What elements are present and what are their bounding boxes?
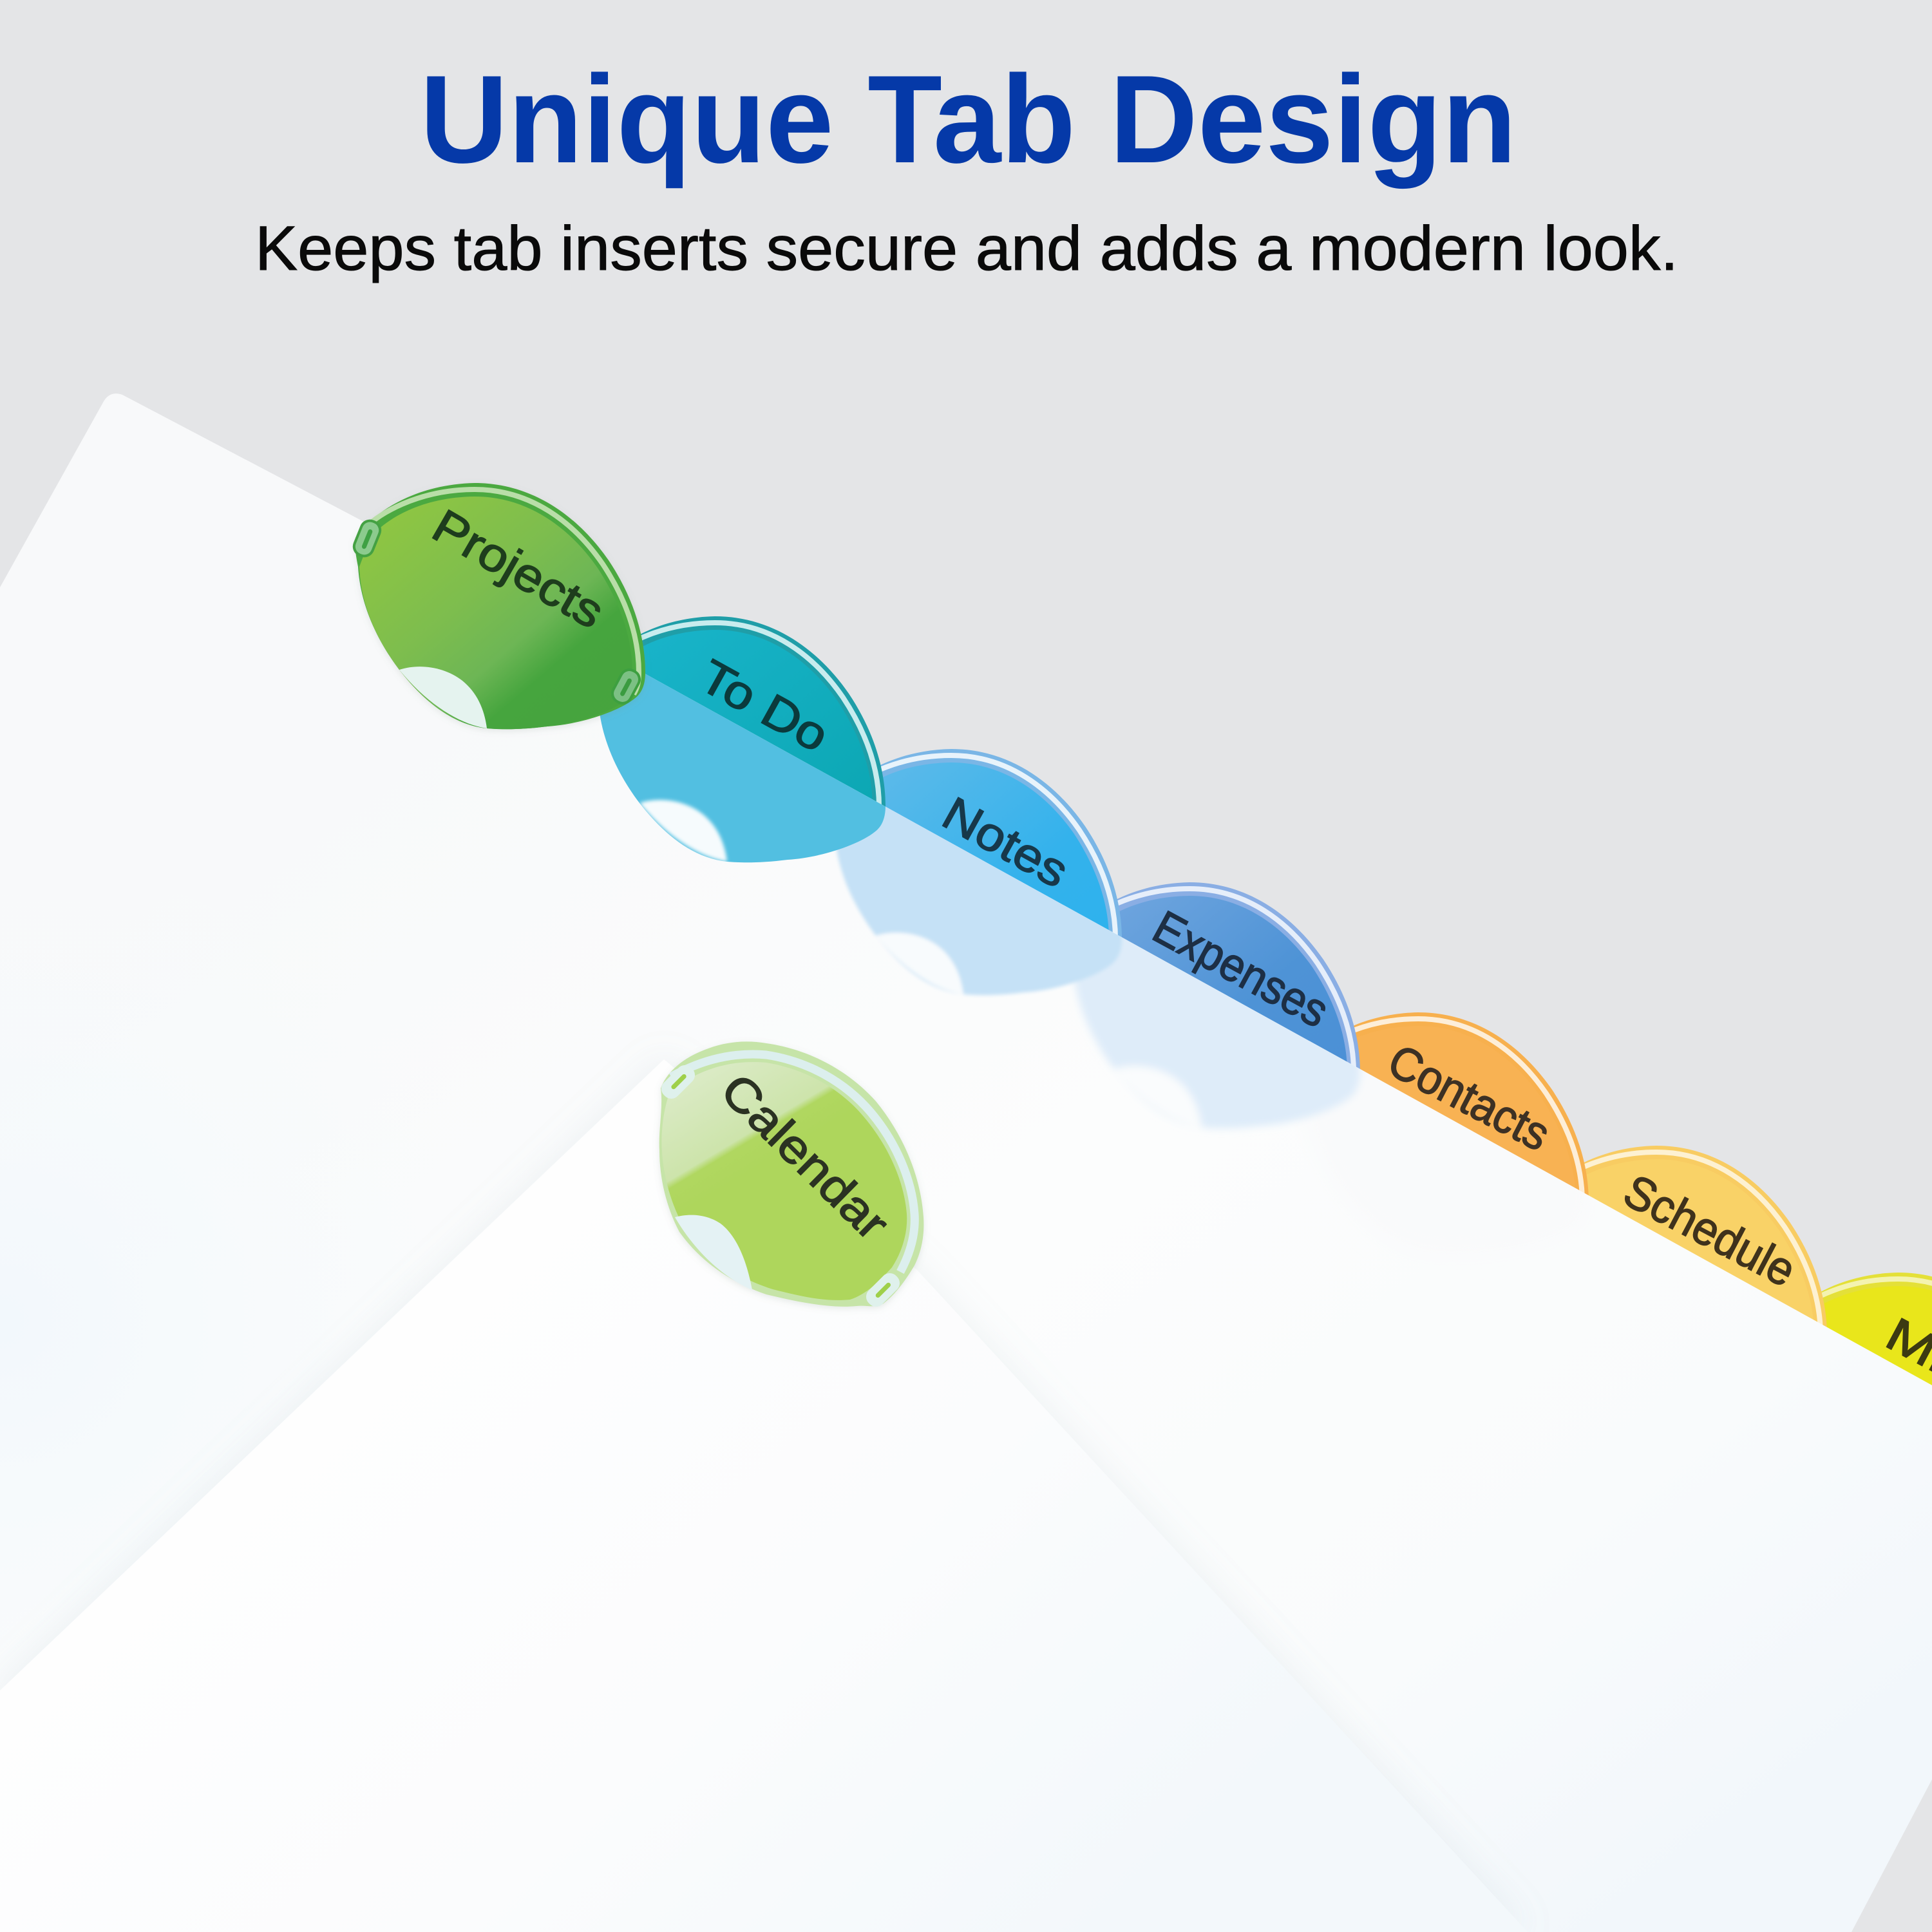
tab: Contacts: Contacts	[1380, 1034, 1558, 1161]
tab: Projects	[352, 483, 645, 729]
notch: white thumb cut-out	[399, 667, 487, 728]
title: Unique Tab Design	[420, 50, 1517, 189]
face: green tab insert	[662, 1062, 907, 1300]
nub: lower right capsule	[609, 667, 643, 706]
tab: To Do	[595, 616, 886, 862]
rim: pale stripe	[671, 1054, 914, 1272]
nub: lower right capsule	[862, 1269, 904, 1311]
tab: Notes: Notes	[934, 787, 1077, 898]
notch: white thumb cut-out	[675, 1215, 752, 1290]
tab: Schedule	[1537, 1146, 1827, 1392]
nub: upper left capsule	[352, 518, 383, 559]
panel: front divider sheet	[0, 1059, 1528, 1932]
tab seen through sheet: stacked frosted tabs	[595, 616, 1589, 1258]
nub: upper left capsule	[658, 1061, 699, 1103]
tab: Calendar	[658, 1041, 923, 1311]
tab: Expenses: Expenses	[1144, 901, 1337, 1037]
tab: Contacts	[1298, 1012, 1589, 1258]
label: Calendar: Calendar	[711, 1064, 899, 1250]
tab: Expenses	[1070, 882, 1360, 1128]
label: Projects: Projects	[424, 500, 612, 639]
tab: Misc	[1778, 1273, 1932, 1519]
subtitle: Keeps tab inserts secure and adds a modern look.	[255, 213, 1678, 283]
panel: back divider sheet	[0, 393, 1932, 1932]
tab: To Do: To Do	[691, 650, 837, 762]
tab: Notes	[831, 749, 1122, 995]
tab: Schedule: Schedule	[1616, 1164, 1804, 1297]
